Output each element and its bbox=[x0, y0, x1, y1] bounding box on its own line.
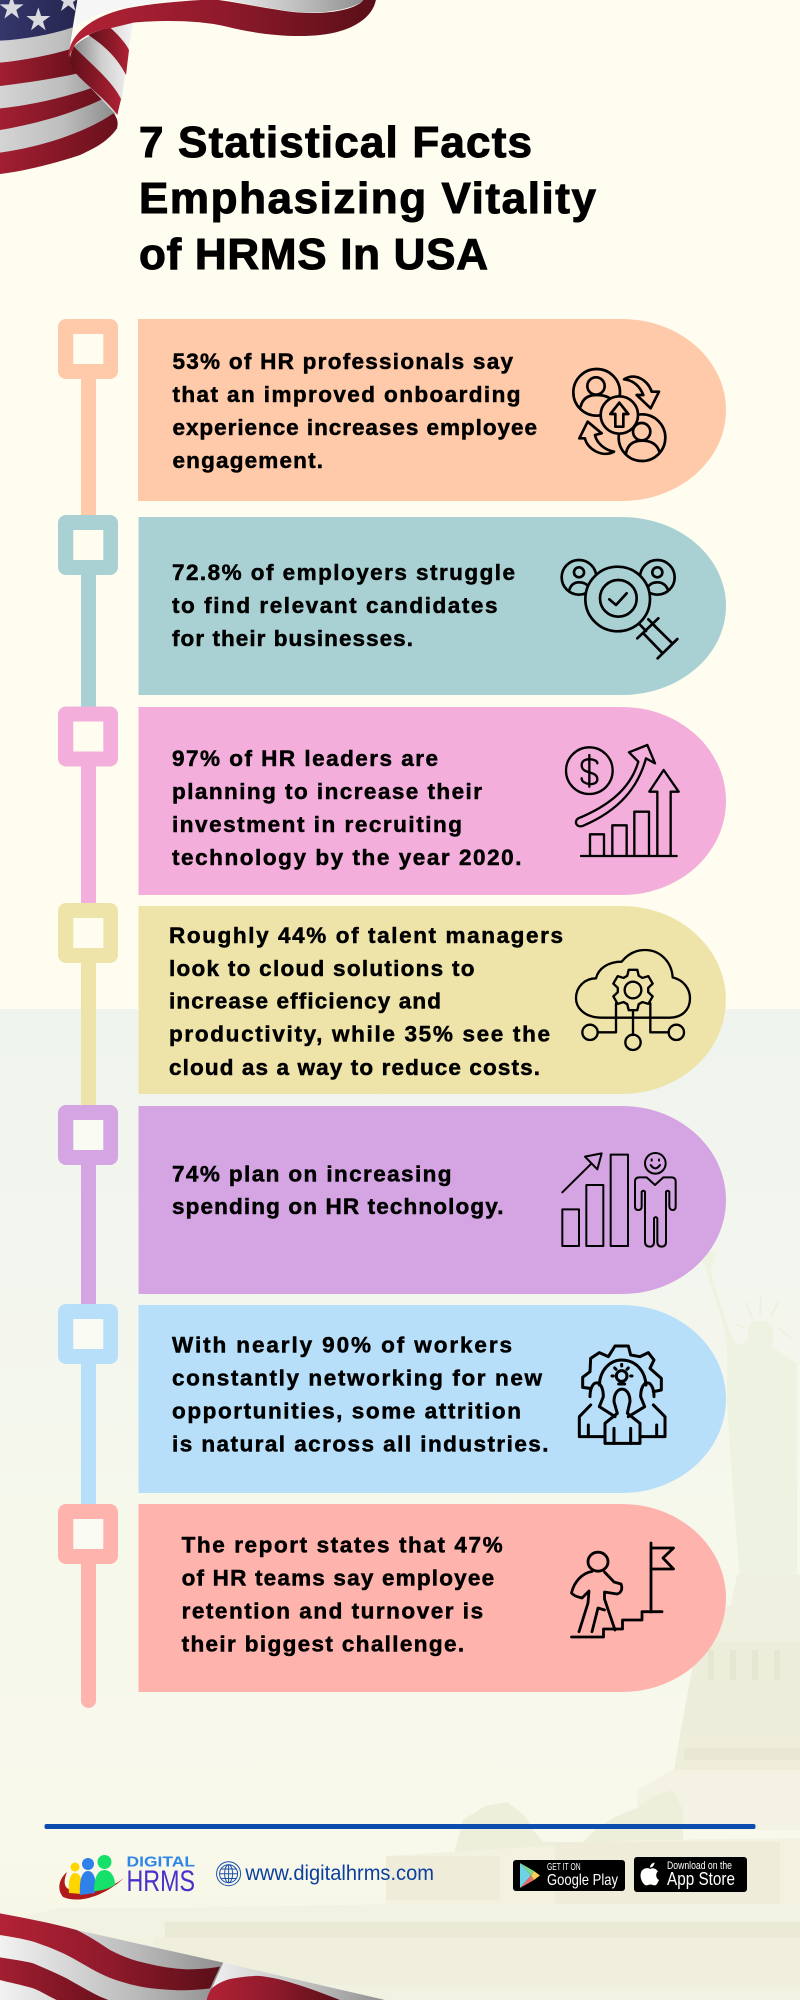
text: fact 5 bbox=[172, 1162, 504, 1219]
text: fact 3: 97% of HR leaders are bbox=[172, 746, 438, 771]
text: fact 2: 72.8% of employers struggle bbox=[172, 560, 515, 585]
timeline connector: step 5 bbox=[58, 1105, 118, 1308]
title: of HRMS In USA bbox=[139, 230, 488, 279]
text: fact 1: 53% of HR professionals say bbox=[172, 349, 513, 374]
text: fact 7: of HR teams say employee bbox=[182, 1566, 494, 1591]
text: fact 7: retention and turnover is bbox=[182, 1599, 483, 1624]
text: fact 3: investment in recruiting bbox=[172, 812, 462, 837]
logo wordmark: DIGITAL bbox=[126, 1854, 195, 1871]
text: fact 7: The report states that 47% bbox=[182, 1533, 503, 1558]
title: Emphasizing Vitality bbox=[139, 174, 597, 223]
footer divider bbox=[44, 1824, 756, 1829]
timeline connector: step 4 bbox=[58, 903, 118, 1110]
text: fact 4: look to cloud solutions to bbox=[169, 956, 474, 981]
icon: apple bbox=[641, 1862, 659, 1885]
text: fact 2: to find relevant candidates bbox=[172, 593, 498, 618]
text: fact 3: technology by the year 2020. bbox=[172, 845, 522, 870]
text: fact 4: productivity, while 35% see the bbox=[169, 1022, 550, 1046]
text: fact 6: opportunities, some attrition bbox=[172, 1399, 521, 1424]
logo wordmark bbox=[126, 1854, 195, 1898]
text: fact 7 bbox=[182, 1533, 503, 1657]
text: fact 2: for their businesses. bbox=[172, 626, 413, 651]
text: fact 4: increase efficiency and bbox=[169, 988, 441, 1014]
badge: App Store: App Store bbox=[667, 1869, 735, 1889]
icon: team with idea gear bbox=[579, 1346, 665, 1443]
text: fact 6: constantly networking for new bbox=[172, 1366, 542, 1391]
logo wordmark: HRMS bbox=[126, 1865, 195, 1898]
timeline connector: step 2 bbox=[58, 515, 118, 710]
timeline connector: step 7 bbox=[58, 1504, 118, 1708]
timeline connector: step 1 bbox=[58, 319, 118, 520]
text: fact 6: With nearly 90% of workers bbox=[172, 1333, 512, 1358]
icon: people rotation with up arrow bbox=[573, 369, 665, 461]
text: fact 1: engagement. bbox=[172, 448, 323, 473]
timeline connector: step 6 bbox=[58, 1304, 118, 1508]
title: 7 Statistical Facts bbox=[139, 118, 532, 167]
text: fact 1 bbox=[172, 349, 537, 473]
text: fact 4: Roughly 44% of talent managers bbox=[169, 923, 563, 948]
text: fact 5: spending on HR technology. bbox=[172, 1194, 504, 1219]
icon: person climbing stairs to flag bbox=[572, 1543, 674, 1637]
icon: globe bbox=[217, 1862, 241, 1886]
text: fact 7: their biggest challenge. bbox=[182, 1632, 464, 1657]
badge: App Store: Download on the bbox=[667, 1860, 732, 1872]
text: fact 1: experience increases employee bbox=[172, 415, 537, 440]
flag: bottom left bbox=[0, 1913, 385, 2000]
blue canton with stars bbox=[0, 0, 80, 41]
icon: candidate search magnifier bbox=[562, 560, 677, 658]
icon: play triangle bbox=[520, 1863, 540, 1888]
text: fact 3: planning to increase their bbox=[172, 779, 482, 804]
panel: fact 2 bbox=[138, 517, 726, 695]
badge: Google Play: GET IT ON bbox=[547, 1862, 581, 1873]
text: fact 1: that an improved onboarding bbox=[172, 382, 520, 407]
icon: cloud with gear and network bbox=[576, 950, 690, 1050]
panel: fact 6 bbox=[138, 1305, 726, 1493]
flag: top left bbox=[0, 0, 376, 174]
website link: www.digitalhrms.com bbox=[244, 1862, 434, 1885]
text: fact 4 bbox=[169, 923, 563, 1080]
panel: fact 4 bbox=[138, 906, 726, 1094]
fold bbox=[70, 23, 133, 115]
text: fact 6: is natural across all industries. bbox=[172, 1432, 548, 1457]
text: fact 4: cloud as a way to reduce costs. bbox=[169, 1055, 540, 1080]
badge: Google Play: Google Play bbox=[547, 1872, 618, 1889]
panel: fact 5 bbox=[138, 1106, 726, 1294]
background image: statue of liberty and island bbox=[0, 1252, 800, 2000]
logo: Digital HRMS bbox=[59, 1854, 195, 1900]
panel: fact 3 bbox=[138, 707, 726, 895]
timeline connector: step 3 bbox=[58, 706, 118, 907]
panel: fact 1 bbox=[138, 319, 726, 501]
logo mark bbox=[59, 1855, 124, 1900]
panel: fact 7 bbox=[138, 1504, 726, 1692]
badge: Google Play bbox=[513, 1860, 625, 1891]
text: fact 3 bbox=[172, 746, 522, 870]
text: fact 2 bbox=[172, 560, 515, 651]
text: fact 5: 74% plan on increasing bbox=[172, 1162, 452, 1187]
title bbox=[139, 118, 597, 279]
icon: growth bars with person bbox=[562, 1153, 676, 1247]
icon: investment growth chart bbox=[566, 745, 679, 856]
text: fact 6 bbox=[172, 1333, 548, 1457]
badge: App Store bbox=[634, 1857, 747, 1892]
